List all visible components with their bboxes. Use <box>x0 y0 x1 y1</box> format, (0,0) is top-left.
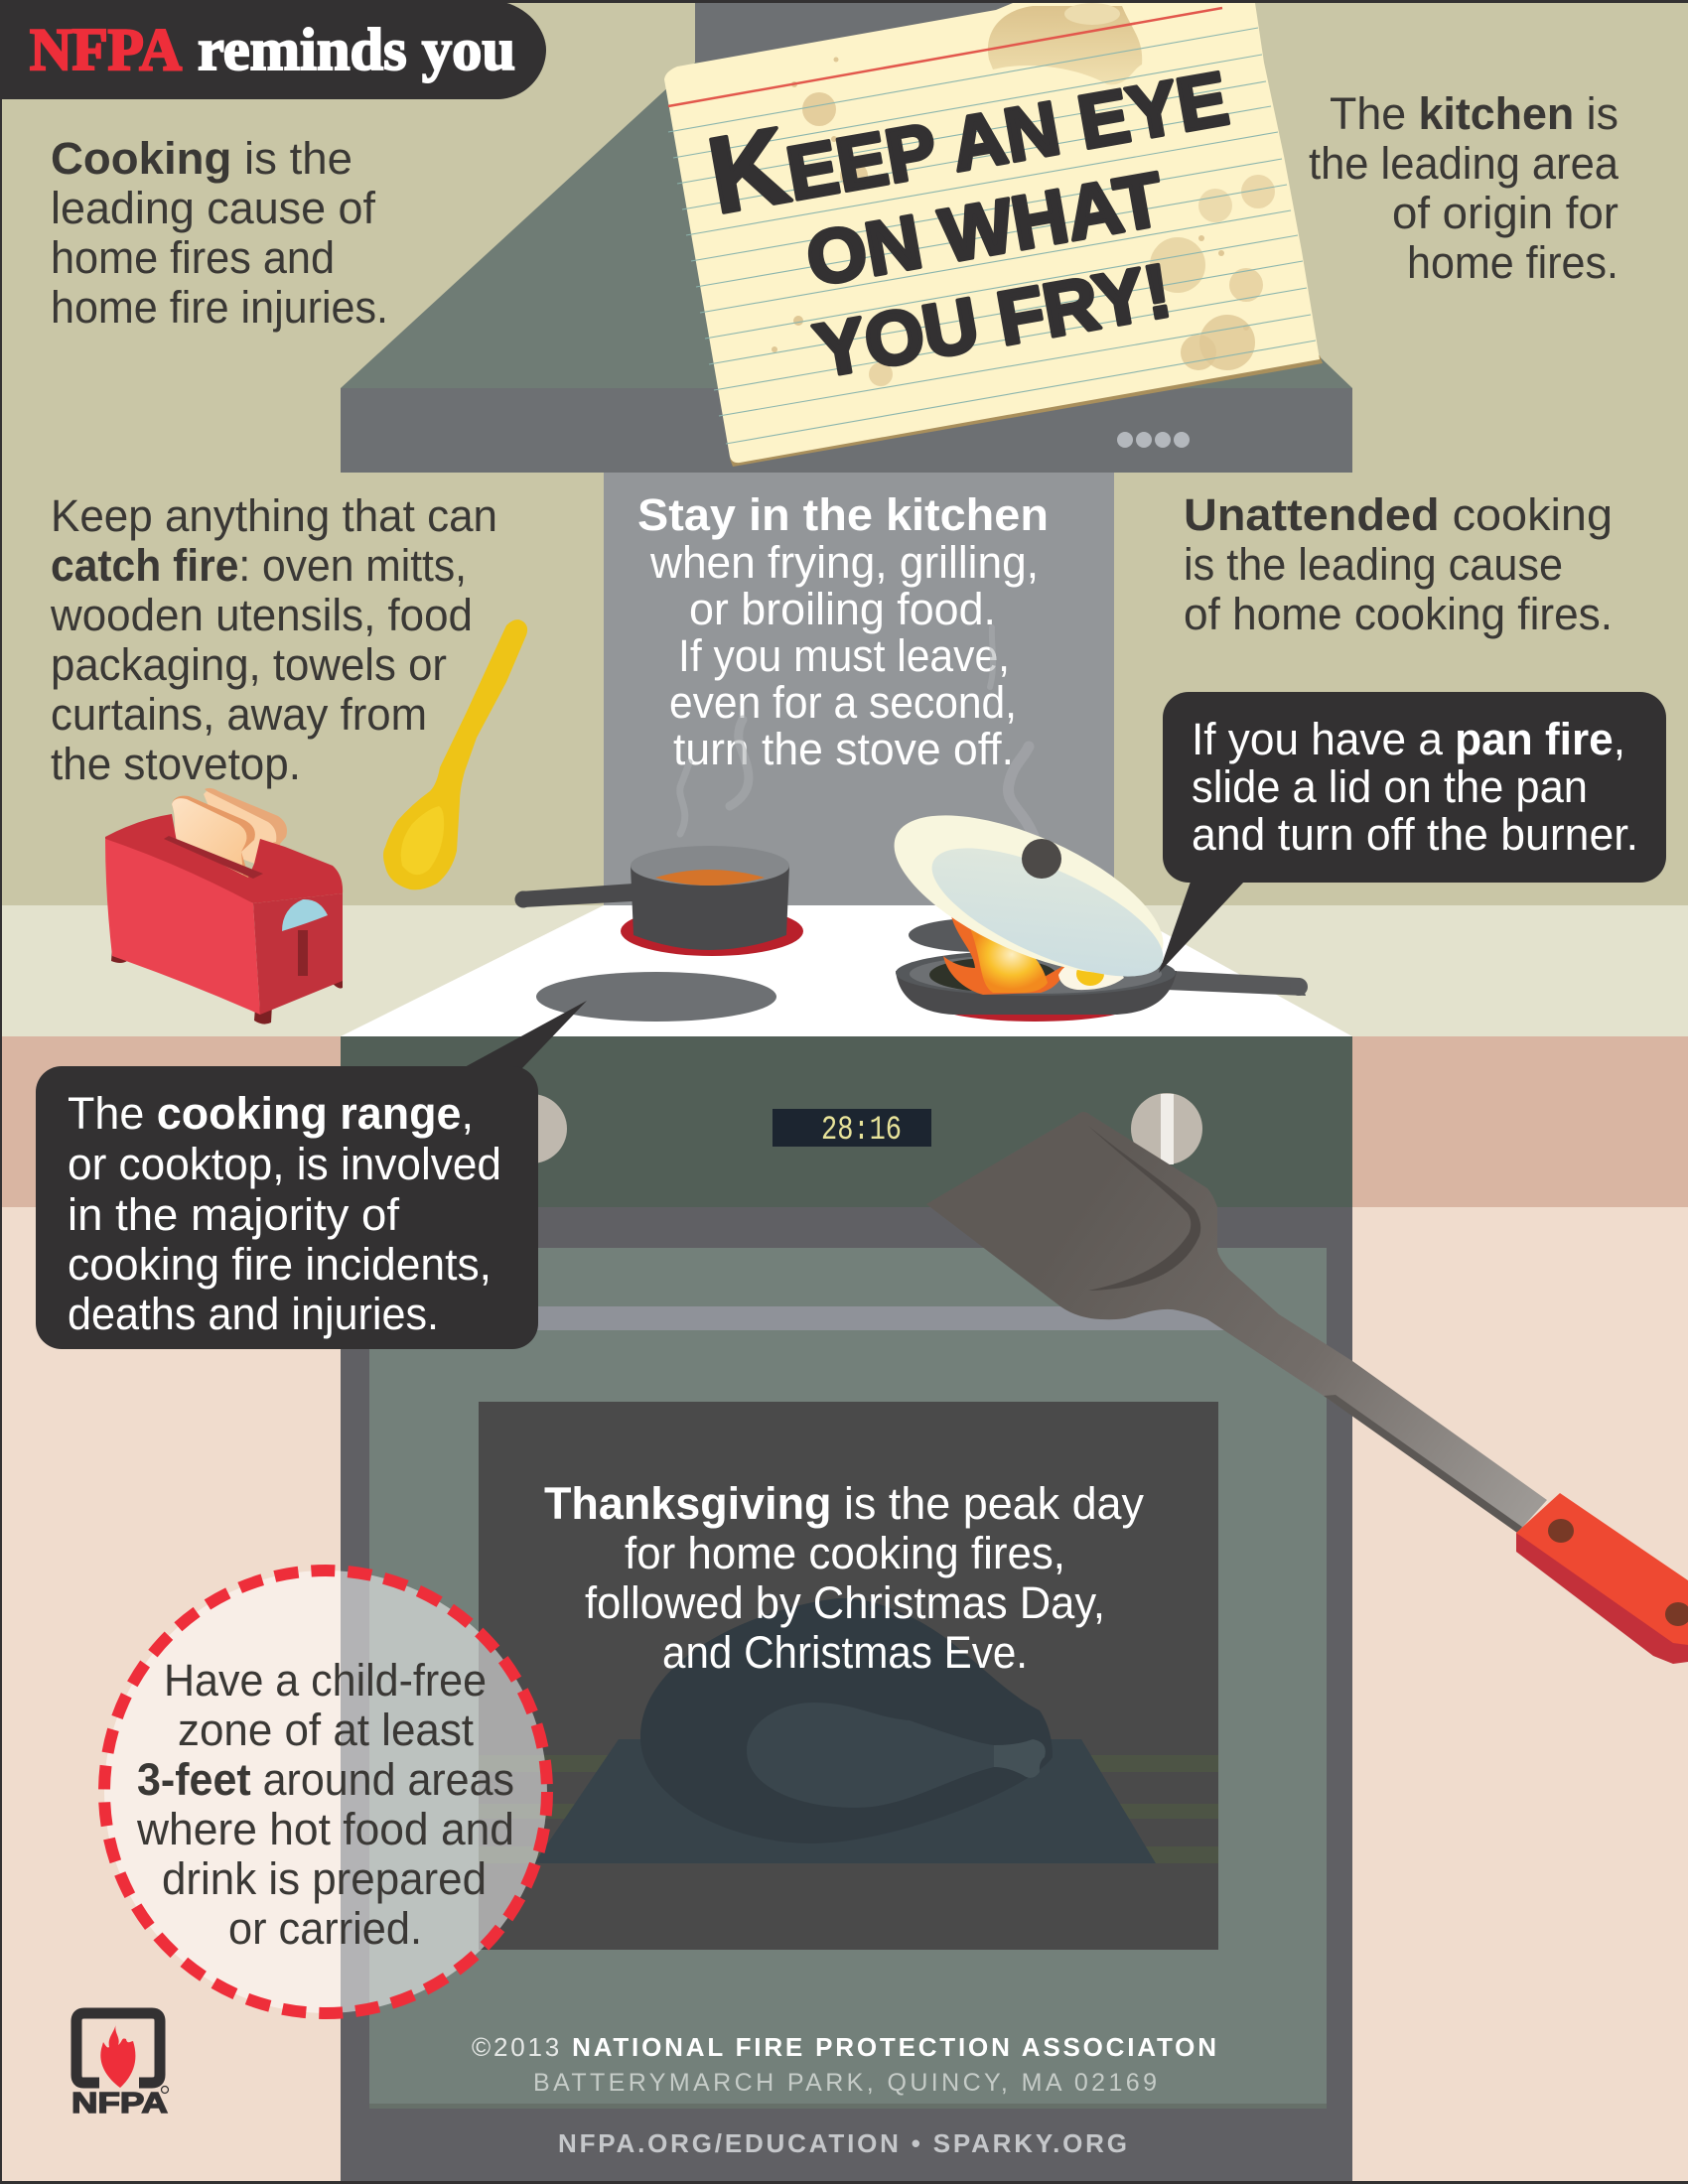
text: unattended cooking <box>1184 489 1613 639</box>
oven timer <box>773 1109 931 1150</box>
callout: cooking range: in the majority of <box>68 1189 400 1240</box>
saucepan on burner <box>514 846 803 956</box>
toast slices <box>172 788 287 879</box>
background: counter <box>0 905 1688 1036</box>
note card: keep an eye on what you fry <box>664 3 1323 467</box>
oven door <box>369 1248 1327 2109</box>
text: keep anything that can catch fire: wooden utensils, food <box>50 590 473 640</box>
spatula <box>926 1112 1688 1664</box>
text: keep anything that can catch fire: catch fire: oven mitts, <box>51 540 467 591</box>
background: kitchen wall <box>0 0 1688 905</box>
NFPA logo: NFPA <box>71 2088 168 2119</box>
door handle <box>369 1306 1243 1330</box>
text: stay in the kitchen: Stay in the kitchen <box>637 489 1049 540</box>
circle: child-free zone: or carried. <box>228 1903 422 1954</box>
circle: child-free zone <box>104 1570 547 2013</box>
text: stay in the kitchen <box>637 489 1049 774</box>
flame <box>943 908 1068 995</box>
text: kitchen leading area: The kitchen is <box>1330 88 1618 139</box>
background: lower wall band <box>0 1036 1688 1207</box>
text: cooking leading cause <box>51 133 388 333</box>
circle: child-free zone: where hot food and <box>136 1804 514 1854</box>
NFPA logo <box>71 2013 169 2119</box>
ruled lines <box>668 28 1316 444</box>
text: stay in the kitchen: turn the stove off. <box>673 724 1014 774</box>
text: stay in the kitchen: or broiling food. <box>689 584 996 634</box>
callout: cooking range: cooking fire incidents, <box>68 1239 492 1290</box>
note headline: ON WHAT <box>800 157 1169 303</box>
text: stay in the kitchen: If you must leave, <box>678 630 1010 681</box>
text: thanksgiving peak day <box>544 1478 1144 1678</box>
text: unattended cooking: of home cooking fires. <box>1184 589 1613 639</box>
text: unattended cooking: is the leading cause <box>1184 539 1563 590</box>
text: kitchen leading area: the leading area <box>1309 138 1619 189</box>
stovetop <box>341 905 1352 1036</box>
header pill <box>0 0 546 99</box>
callout: pan fire <box>1159 692 1666 973</box>
oven knob left <box>495 1094 567 1163</box>
icon: wooden spoon <box>383 619 527 889</box>
frying pan with flame, egg and lid <box>873 783 1308 1022</box>
circle: child-free zone: 3-feet around areas <box>137 1754 514 1805</box>
text: thanksgiving peak day: followed by Christmas Day, <box>585 1577 1105 1628</box>
fried egg <box>1058 962 1124 990</box>
footer: websites: NFPA.ORG/EDUCATION • SPARKY.ORG <box>558 2128 1127 2158</box>
callout: pan fire: If you have a pan fire, <box>1192 714 1625 764</box>
footer: copyright: ©2013 NATIONAL FIRE PROTECTION ASSOCIATON <box>472 2032 1216 2062</box>
range hood <box>341 0 1352 473</box>
callout: pan fire: slide a lid on the pan <box>1192 761 1588 812</box>
text: thanksgiving peak day: for home cooking fires, <box>625 1528 1065 1578</box>
header pill: reminds you <box>198 17 515 82</box>
turkey in oven <box>640 1598 1053 1843</box>
callout: pan fire: and turn off the burner. <box>1192 809 1638 860</box>
circle: child-free zone: Have a child-free <box>164 1655 487 1706</box>
oven timer: 28:16 <box>821 1112 902 1150</box>
note headline <box>700 27 1235 394</box>
note headline: YOU FRY! <box>808 248 1177 394</box>
text: kitchen leading area <box>1309 88 1619 288</box>
text: keep anything that can catch fire <box>50 490 497 789</box>
header pill: NFPA <box>30 17 182 82</box>
burner: back right <box>909 918 1048 952</box>
grease stains <box>772 3 1275 386</box>
text: keep anything that can catch fire: Keep anything that can <box>51 490 497 541</box>
burner: empty front left <box>536 972 776 1022</box>
text: cooking leading cause: Cooking is the <box>51 133 352 184</box>
oven window <box>479 1402 1218 1950</box>
footer: copyright <box>472 2032 1216 2097</box>
text: cooking leading cause: home fires and <box>51 232 335 283</box>
text: cooking leading cause: home fire injuries. <box>51 282 388 333</box>
text: thanksgiving peak day: Thanksgiving is the peak day <box>544 1478 1144 1529</box>
icon: toaster <box>105 788 343 1024</box>
circle: child-free zone: drink is prepared <box>162 1853 487 1904</box>
text: cooking leading cause: leading cause of <box>51 183 375 233</box>
text: keep anything that can catch fire: curtains, away from <box>51 689 427 740</box>
footer: copyright: BATTERYMARCH PARK, QUINCY, MA 02169 <box>533 2069 1157 2097</box>
note headline: KEEP AN EYE <box>700 27 1235 236</box>
text: keep anything that can catch fire: packaging, towels or <box>51 639 447 690</box>
callout: cooking range: The cooking range, <box>68 1088 474 1139</box>
background: floor area <box>0 1207 1688 2184</box>
oven knob right <box>1131 1093 1202 1164</box>
text: stay in the kitchen: even for a second, <box>669 677 1017 728</box>
backsplash <box>604 473 1114 905</box>
callout: cooking range <box>36 1001 587 1349</box>
text: keep anything that can catch fire: the stovetop. <box>51 739 301 789</box>
steam <box>680 627 1034 836</box>
text: stay in the kitchen: when frying, grilling, <box>649 537 1039 588</box>
text: kitchen leading area: home fires. <box>1407 237 1618 288</box>
callout: cooking range: deaths and injuries. <box>68 1289 439 1339</box>
text: unattended cooking: Unattended cooking <box>1184 489 1613 540</box>
callout: cooking range: or cooktop, is involved <box>68 1139 501 1189</box>
circle: child-free zone: zone of at least <box>178 1705 474 1755</box>
text: kitchen leading area: of origin for <box>1392 188 1618 238</box>
pan lid <box>873 783 1185 1006</box>
control panel <box>341 1036 1352 1207</box>
text: thanksgiving peak day: and Christmas Eve. <box>662 1627 1028 1678</box>
oven range <box>341 1036 1352 2184</box>
